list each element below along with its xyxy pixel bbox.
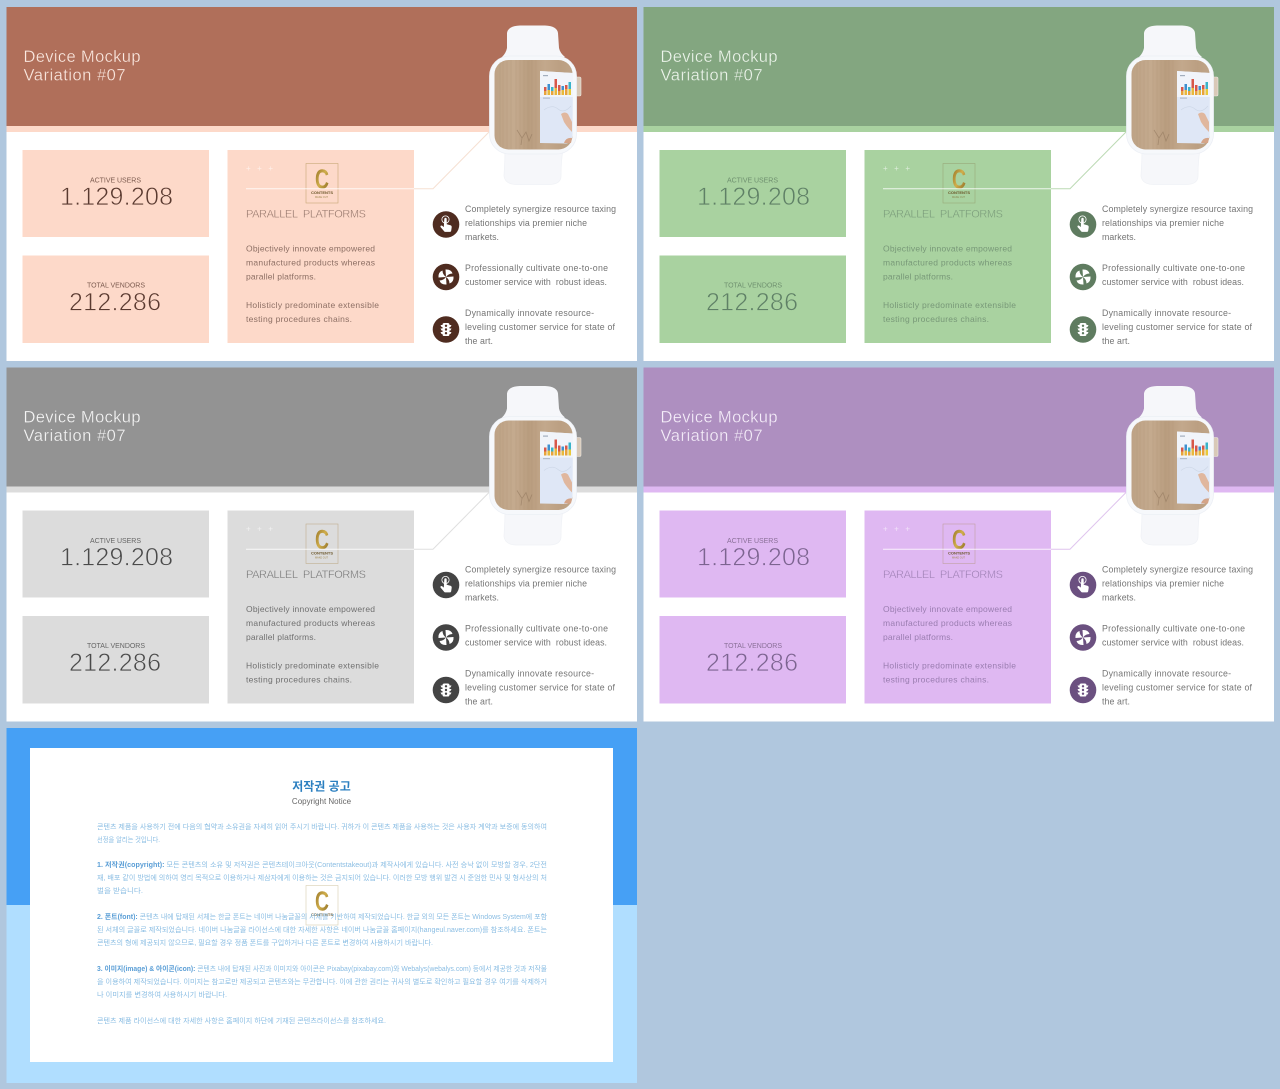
logo watermark: MAKE OUT xyxy=(952,196,965,199)
logo watermark: CONTENTS xyxy=(311,550,333,556)
title: Variation #07 xyxy=(660,66,762,84)
copyright heading: 저작권 공고 xyxy=(292,778,351,794)
list item: fan: customer service with robust ideas. xyxy=(465,277,607,287)
clause 2: font: 된 서체의 글꼴로 제작되었습니다. 네이버 나눔글꼴 라이선스에 대한 자세한 사항은 네이버 나눔글꼴 홈페이지(hangeul.naver.com)를 참조하세요. 폰트는 xyxy=(97,925,548,934)
list item: touch: Completely synergize resource taxing xyxy=(1102,204,1253,214)
list item: traffic light: leveling customer service for state of xyxy=(1102,682,1253,692)
clause 2: font xyxy=(97,912,548,947)
list item: traffic light: leveling customer service for state of xyxy=(1102,322,1253,332)
title: Device Mockup xyxy=(24,48,140,66)
stat card: active users xyxy=(22,150,209,237)
title: Device Mockup xyxy=(660,408,778,426)
logo watermark: CONTENTS xyxy=(311,190,333,195)
card: parallel platforms: testing procedures chains. xyxy=(246,314,352,324)
stat card: total vendors: TOTAL VENDORS xyxy=(724,643,782,650)
logo watermark: C xyxy=(952,164,966,194)
clause 1: copyright: 1. 저작권(copyright): 모든 콘텐츠의 소유 및 저작권은 콘텐츠테이크아웃(Contentstakeout)과 제작사에게 있습니다. 사전 승낙 없이 모방할 경우, 2단전 xyxy=(97,860,547,869)
list item: traffic light: the art. xyxy=(465,336,493,346)
logo watermark: C xyxy=(315,524,329,555)
clause 3: image and icon: 을 이용하여 제작되었습니다. 이미지는 참고로만 제공되고 콘텐츠와는 무관합니다. 이에 관한 권리는 귀사의 별도로 확인하고 필요할 경우 여기를 삭제하거 xyxy=(97,977,547,986)
logo watermark xyxy=(943,164,975,203)
list item: traffic light xyxy=(1070,668,1253,706)
logo watermark: MAKE OUT xyxy=(952,556,965,560)
list item: fan: Professionally cultivate one-to-one xyxy=(465,624,608,634)
logo watermark xyxy=(306,164,338,203)
panel: brown device mockup xyxy=(6,7,637,361)
list item: touch: markets. xyxy=(465,232,499,242)
card: parallel platforms: PARALLEL PLATFORMS xyxy=(246,569,366,581)
list item: touch xyxy=(433,204,616,242)
logo watermark: CONTENTS xyxy=(311,912,333,917)
clause 3: image and icon: 나 이미지를 변경하여 사용하시기 바랍니다. xyxy=(97,990,227,999)
card: parallel platforms: parallel platforms. xyxy=(246,632,316,642)
clause 1: copyright: 벌을 받습니다. xyxy=(97,886,143,895)
title: Variation #07 xyxy=(24,66,126,84)
callout line xyxy=(246,131,490,189)
panel: copyright notice xyxy=(6,728,637,1083)
stat card: active users: ACTIVE USERS xyxy=(727,538,778,545)
list item: traffic light xyxy=(433,308,616,346)
logo watermark: CONTENTS xyxy=(948,190,970,195)
closing note: 콘텐츠 제품 라이선스에 대한 자세한 사항은 홈페이지 하단에 기재된 콘텐츠라이선스를 참조하세요. xyxy=(97,1016,386,1025)
card: parallel platforms: Holisticly predominate extensible xyxy=(883,300,1016,310)
card: parallel platforms: parallel platforms. xyxy=(883,271,953,281)
watch mockup xyxy=(490,26,581,184)
card: parallel platforms: Holisticly predominate extensible xyxy=(246,660,379,670)
stat card: total vendors: TOTAL VENDORS xyxy=(87,282,145,290)
panel: green device mockup xyxy=(644,7,1274,361)
list item: fan xyxy=(1070,263,1245,290)
logo watermark: C xyxy=(315,164,329,194)
list item: fan xyxy=(433,624,608,651)
header band xyxy=(6,7,637,126)
stat card: active users xyxy=(660,510,846,598)
clause 3: image and icon xyxy=(97,964,548,999)
list item: touch: relationships via premier niche xyxy=(1102,578,1224,588)
list item: traffic light: the art. xyxy=(1102,696,1130,706)
card: parallel platforms xyxy=(228,150,414,343)
list item: fan: customer service with robust ideas. xyxy=(465,638,607,648)
card: parallel platforms: Holisticly predominate extensible xyxy=(883,660,1016,670)
logo watermark xyxy=(306,524,338,564)
card: parallel platforms xyxy=(864,510,1051,704)
stat card: active users: 1.129.208 xyxy=(60,544,173,572)
stat card: active users: ACTIVE USERS xyxy=(90,178,141,184)
header band xyxy=(6,368,637,486)
copyright subheading: Copyright Notice xyxy=(292,797,352,806)
stat card: active users: ACTIVE USERS xyxy=(90,538,141,545)
card: parallel platforms: manufactured products whereas xyxy=(246,257,375,267)
list item: fan: Professionally cultivate one-to-one xyxy=(1102,624,1245,634)
list item: touch: Completely synergize resource taxing xyxy=(465,564,616,574)
logo watermark: MAKE OUT xyxy=(315,196,328,199)
clause 1: copyright: 재, 배포 같이 방법에 의하여 영리 목적으로 이용하거나 제삼자에게 이용하는 것은 금지되어 있습니다. 이러한 모방 행위 발견 시 준엄한 민사 및 형사상의 처 xyxy=(97,873,547,882)
callout line xyxy=(246,492,490,549)
header accent strip xyxy=(6,126,637,132)
list item: traffic light: Dynamically innovate resource- xyxy=(1102,308,1231,318)
stat card: total vendors: 212.286 xyxy=(69,649,161,677)
card: parallel platforms: PARALLEL PLATFORMS xyxy=(883,569,1003,581)
card: parallel platforms: manufactured products whereas xyxy=(246,618,375,628)
card: parallel platforms: Objectively innovate empowered xyxy=(883,604,1012,614)
watch mockup xyxy=(1126,26,1218,184)
title: Variation #07 xyxy=(660,427,762,445)
stat card: total vendors: TOTAL VENDORS xyxy=(87,643,145,650)
list item: touch: relationships via premier niche xyxy=(1102,218,1224,228)
title: Variation #07 xyxy=(24,427,126,445)
list item: fan: customer service with robust ideas. xyxy=(1102,638,1244,648)
list item: touch xyxy=(1070,564,1253,602)
title: Device Mockup xyxy=(24,408,140,426)
stat card: total vendors: 212.286 xyxy=(706,649,798,677)
stat card: total vendors: 212.286 xyxy=(706,288,798,316)
logo watermark: CONTENTS xyxy=(948,550,970,556)
logo watermark xyxy=(943,524,975,564)
stat card: total vendors xyxy=(22,256,209,343)
logo watermark: MAKE OUT xyxy=(315,556,328,560)
header band xyxy=(644,7,1274,126)
card: parallel platforms xyxy=(864,150,1051,343)
stat card: active users xyxy=(660,150,846,237)
card: parallel platforms: manufactured products whereas xyxy=(883,618,1012,628)
stat card: total vendors xyxy=(660,256,846,343)
logo watermark xyxy=(306,886,338,925)
card: parallel platforms: Objectively innovate empowered xyxy=(246,243,375,253)
list item: fan xyxy=(1070,624,1245,651)
list item: touch: markets. xyxy=(1102,232,1136,242)
list item: traffic light: leveling customer service for state of xyxy=(465,322,616,332)
header accent strip xyxy=(644,486,1274,492)
list item: touch: Completely synergize resource taxing xyxy=(465,204,616,214)
list item: traffic light: the art. xyxy=(465,696,493,706)
stat card: active users: ACTIVE USERS xyxy=(727,178,778,184)
list item: touch: relationships via premier niche xyxy=(465,218,587,228)
intro text: 콘텐츠 제품을 사용하기 전에 다음의 협약과 소유권을 자세히 읽어 주시기 바랍니다. 귀하가 이 콘텐츠 제품을 사용하는 것은 사용자 계약과 보증에 동의하여 xyxy=(97,822,547,831)
stat card: total vendors: TOTAL VENDORS xyxy=(724,282,782,290)
list item: touch: markets. xyxy=(1102,592,1136,602)
intro text xyxy=(97,822,547,844)
card: parallel platforms: + + + xyxy=(883,164,910,173)
card: parallel platforms: Holisticly predominate extensible xyxy=(246,300,379,310)
stat card: total vendors xyxy=(22,616,209,704)
logo watermark: C xyxy=(315,886,329,916)
list item: traffic light xyxy=(1070,308,1253,346)
list item: touch xyxy=(1070,204,1253,242)
list item: touch xyxy=(433,564,616,602)
card: parallel platforms: testing procedures chains. xyxy=(883,314,989,324)
list item: fan: Professionally cultivate one-to-one xyxy=(465,263,608,273)
stat card: active users: 1.129.208 xyxy=(697,183,810,211)
list item: touch: relationships via premier niche xyxy=(465,578,587,588)
clause 1: copyright xyxy=(97,860,547,895)
stat card: active users xyxy=(22,510,209,598)
watch mockup xyxy=(1126,386,1218,545)
card: parallel platforms: parallel platforms. xyxy=(246,271,316,281)
card: parallel platforms: PARALLEL PLATFORMS xyxy=(883,209,1003,221)
intro text: 선정을 알리는 것입니다. xyxy=(97,835,160,844)
list item: touch: Completely synergize resource taxing xyxy=(1102,564,1253,574)
panel: gray device mockup xyxy=(6,368,637,722)
callout line xyxy=(883,131,1127,189)
logo watermark: C xyxy=(952,524,966,555)
card: parallel platforms: manufactured products whereas xyxy=(883,257,1012,267)
clause 2: font: 2. 폰트(font): 콘텐츠 내에 탑재된 서체는 한글 폰트는 네이버 나눔글꼴의 서체를 기반하여 제작되었습니다. 한글 외의 모든 폰트는 Windows System에 포함 xyxy=(97,912,548,921)
card: parallel platforms: Objectively innovate empowered xyxy=(246,604,375,614)
stat card: total vendors: 212.286 xyxy=(69,288,161,316)
list item: traffic light xyxy=(433,668,616,706)
card: parallel platforms xyxy=(228,510,414,704)
header band xyxy=(644,368,1274,486)
stat card: active users: 1.129.208 xyxy=(60,183,173,211)
stat card: total vendors xyxy=(660,616,846,704)
card: parallel platforms: + + + xyxy=(883,524,910,534)
watch mockup xyxy=(490,386,581,545)
list item: fan xyxy=(433,263,608,290)
card: parallel platforms: testing procedures chains. xyxy=(883,674,989,684)
list item: traffic light: Dynamically innovate resource- xyxy=(1102,668,1231,678)
title: Device Mockup xyxy=(660,48,778,66)
clause 2: font: 콘텐츠의 형에 제공되지 않으므로, 필요할 경우 정품 폰트를 구입하거나 다른 폰트로 변경하여 사용하시기 바랍니다. xyxy=(97,938,433,947)
list item: traffic light: leveling customer service for state of xyxy=(465,682,616,692)
card: parallel platforms: PARALLEL PLATFORMS xyxy=(246,209,366,221)
panel: purple device mockup xyxy=(644,368,1274,722)
callout line xyxy=(883,492,1127,549)
card: parallel platforms: testing procedures chains. xyxy=(246,674,352,684)
list item: touch: markets. xyxy=(465,592,499,602)
clause 3: image and icon: 3. 이미지(image) & 아이콘(icon): 콘텐츠 내에 탑재된 사진과 이미지와 아이콘은 Pixabay(pixabay.com)와 Webalys(webalys.com) 등에서 제공한 것과 저작물 xyxy=(97,964,548,973)
card: parallel platforms: + + + xyxy=(246,164,273,173)
card: parallel platforms: + + + xyxy=(246,524,273,534)
list item: traffic light: the art. xyxy=(1102,336,1130,346)
card: parallel platforms: parallel platforms. xyxy=(883,632,953,642)
header accent strip xyxy=(6,486,637,492)
stat card: active users: 1.129.208 xyxy=(697,544,810,572)
list item: traffic light: Dynamically innovate resource- xyxy=(465,308,594,318)
list item: fan: customer service with robust ideas. xyxy=(1102,277,1244,287)
header accent strip xyxy=(644,126,1274,132)
card: parallel platforms: Objectively innovate empowered xyxy=(883,243,1012,253)
list item: fan: Professionally cultivate one-to-one xyxy=(1102,263,1245,273)
list item: traffic light: Dynamically innovate resource- xyxy=(465,668,594,678)
